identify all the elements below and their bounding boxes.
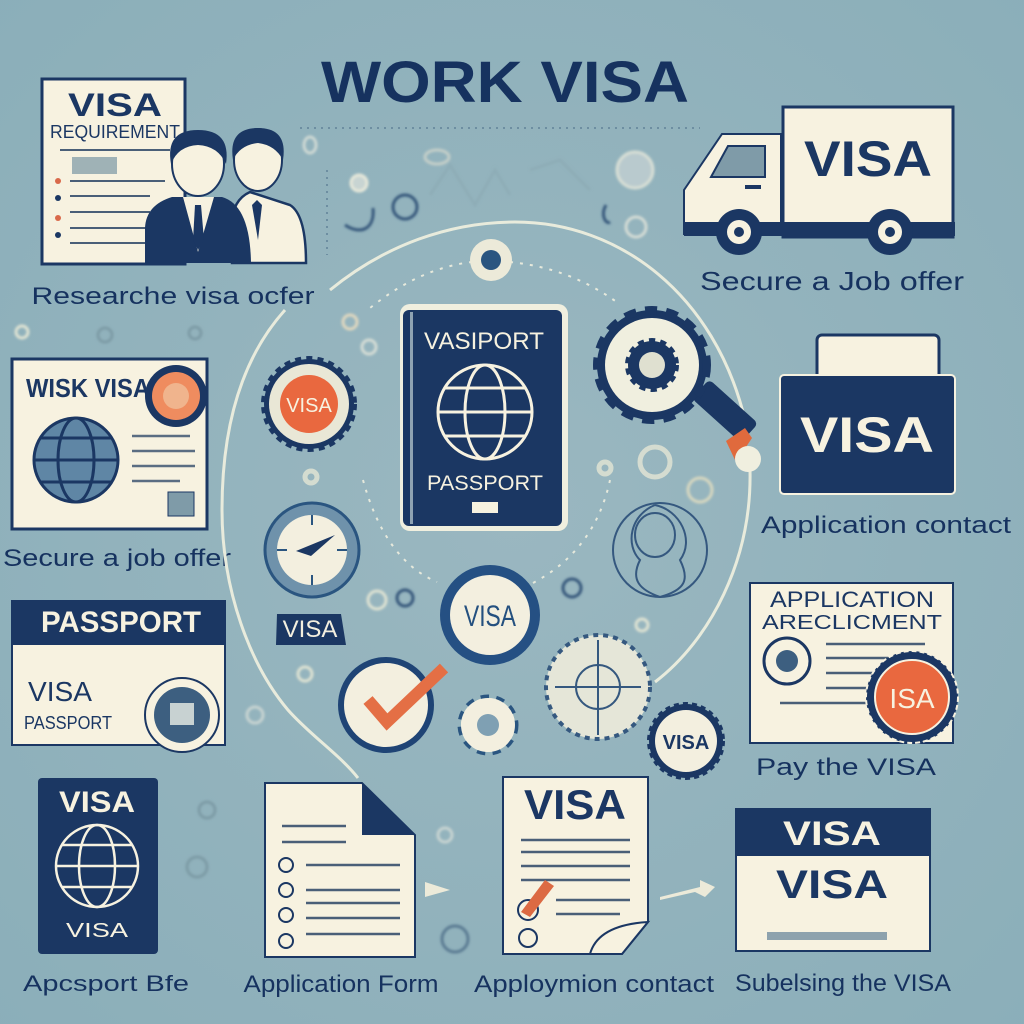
panel: application acknowledgment card — [750, 583, 958, 781]
label: application contact: Application contact — [761, 512, 1011, 539]
label: passport file: Apcsport Bfe — [23, 971, 189, 996]
icon: small gear — [461, 698, 515, 752]
panel: wisk visa card — [3, 359, 231, 572]
panel: visa folder: VISA — [800, 407, 934, 463]
icon: orange seal — [866, 651, 958, 743]
label: research visa: Researche visa ocfer — [32, 283, 315, 310]
panel: visa checklist document: VISA — [524, 781, 626, 828]
icon: small visa seal — [649, 704, 723, 778]
panel: visa requirement document: VISA — [68, 87, 162, 123]
icon: crosshair seal — [546, 635, 650, 739]
panel: delivery truck — [684, 107, 964, 296]
panel: application acknowledgment card: ARECLICMENT — [762, 612, 942, 634]
icon: visa tag — [276, 614, 346, 645]
icon: top circle node — [470, 239, 512, 281]
arrows between steps — [425, 880, 715, 900]
panel: visa checklist document — [474, 777, 714, 998]
panel: visa double card: VISA — [776, 863, 888, 907]
panel: passport card: PASSPORT — [24, 713, 112, 733]
panel: wisk visa card: WISK VISA — [26, 373, 150, 403]
icon: orange visa seal: VISA — [286, 395, 332, 417]
panel: visa double card: VISA — [783, 815, 881, 853]
icon: faint globe — [613, 503, 707, 597]
panel: passport card: PASSPORT — [41, 606, 201, 639]
panel: central passport — [400, 304, 568, 531]
inner dotted ring — [363, 262, 618, 583]
panel: central passport: VASIPORT — [424, 328, 544, 355]
panel: central passport: PASSPORT — [427, 472, 543, 495]
icon: visa tag: VISA — [283, 616, 337, 643]
central arc — [222, 222, 750, 778]
icon: two business people — [145, 128, 306, 263]
icon: gear and magnifier — [597, 310, 761, 472]
label: application form: Application Form — [244, 971, 438, 998]
icon: round visa badge — [440, 565, 540, 665]
panel: visa requirement document — [32, 79, 315, 310]
title: WORK VISA — [321, 50, 689, 115]
panel: passport card — [12, 601, 225, 752]
label: application contact: Apploymion contact — [474, 971, 714, 998]
label: secure a job offer: Secure a Job offer — [700, 266, 964, 296]
icon: seal — [145, 365, 207, 427]
icon: globe — [438, 365, 532, 459]
label: submitting the visa: Subelsing the VISA — [735, 970, 951, 997]
icon: emblem — [764, 638, 810, 684]
icon: red pen — [521, 880, 554, 917]
icon: round visa badge: VISA — [464, 600, 516, 633]
icon: truck wheels — [716, 209, 913, 255]
panel: application acknowledgment card: APPLICATION — [770, 587, 934, 612]
icon: small visa seal: VISA — [663, 732, 709, 754]
decorative small rings — [305, 447, 670, 483]
panel: delivery truck: VISA — [804, 131, 932, 187]
icon: orange visa seal — [264, 359, 354, 449]
panel: visa folder — [761, 335, 1011, 539]
icon: checkmark — [341, 660, 444, 750]
icon: compass — [265, 503, 359, 597]
icon: globe — [56, 825, 138, 907]
faint background doodles — [16, 137, 712, 952]
label: pay the visa: Pay the VISA — [756, 754, 936, 781]
panel: visa passport booklet: VISA — [66, 920, 129, 942]
label: secure a job offer: Secure a job offer — [3, 545, 231, 572]
panel: visa requirement document: REQUIREMENT — [50, 122, 180, 142]
panel: application form — [244, 783, 438, 998]
panel: passport card: VISA — [28, 676, 92, 707]
icon: orange seal: ISA — [889, 683, 935, 714]
icon: badge — [145, 678, 219, 752]
icon: globe — [34, 418, 118, 502]
panel: visa passport booklet: VISA — [59, 786, 135, 819]
panel: visa double card — [735, 809, 951, 997]
panel: visa passport booklet — [23, 778, 189, 996]
